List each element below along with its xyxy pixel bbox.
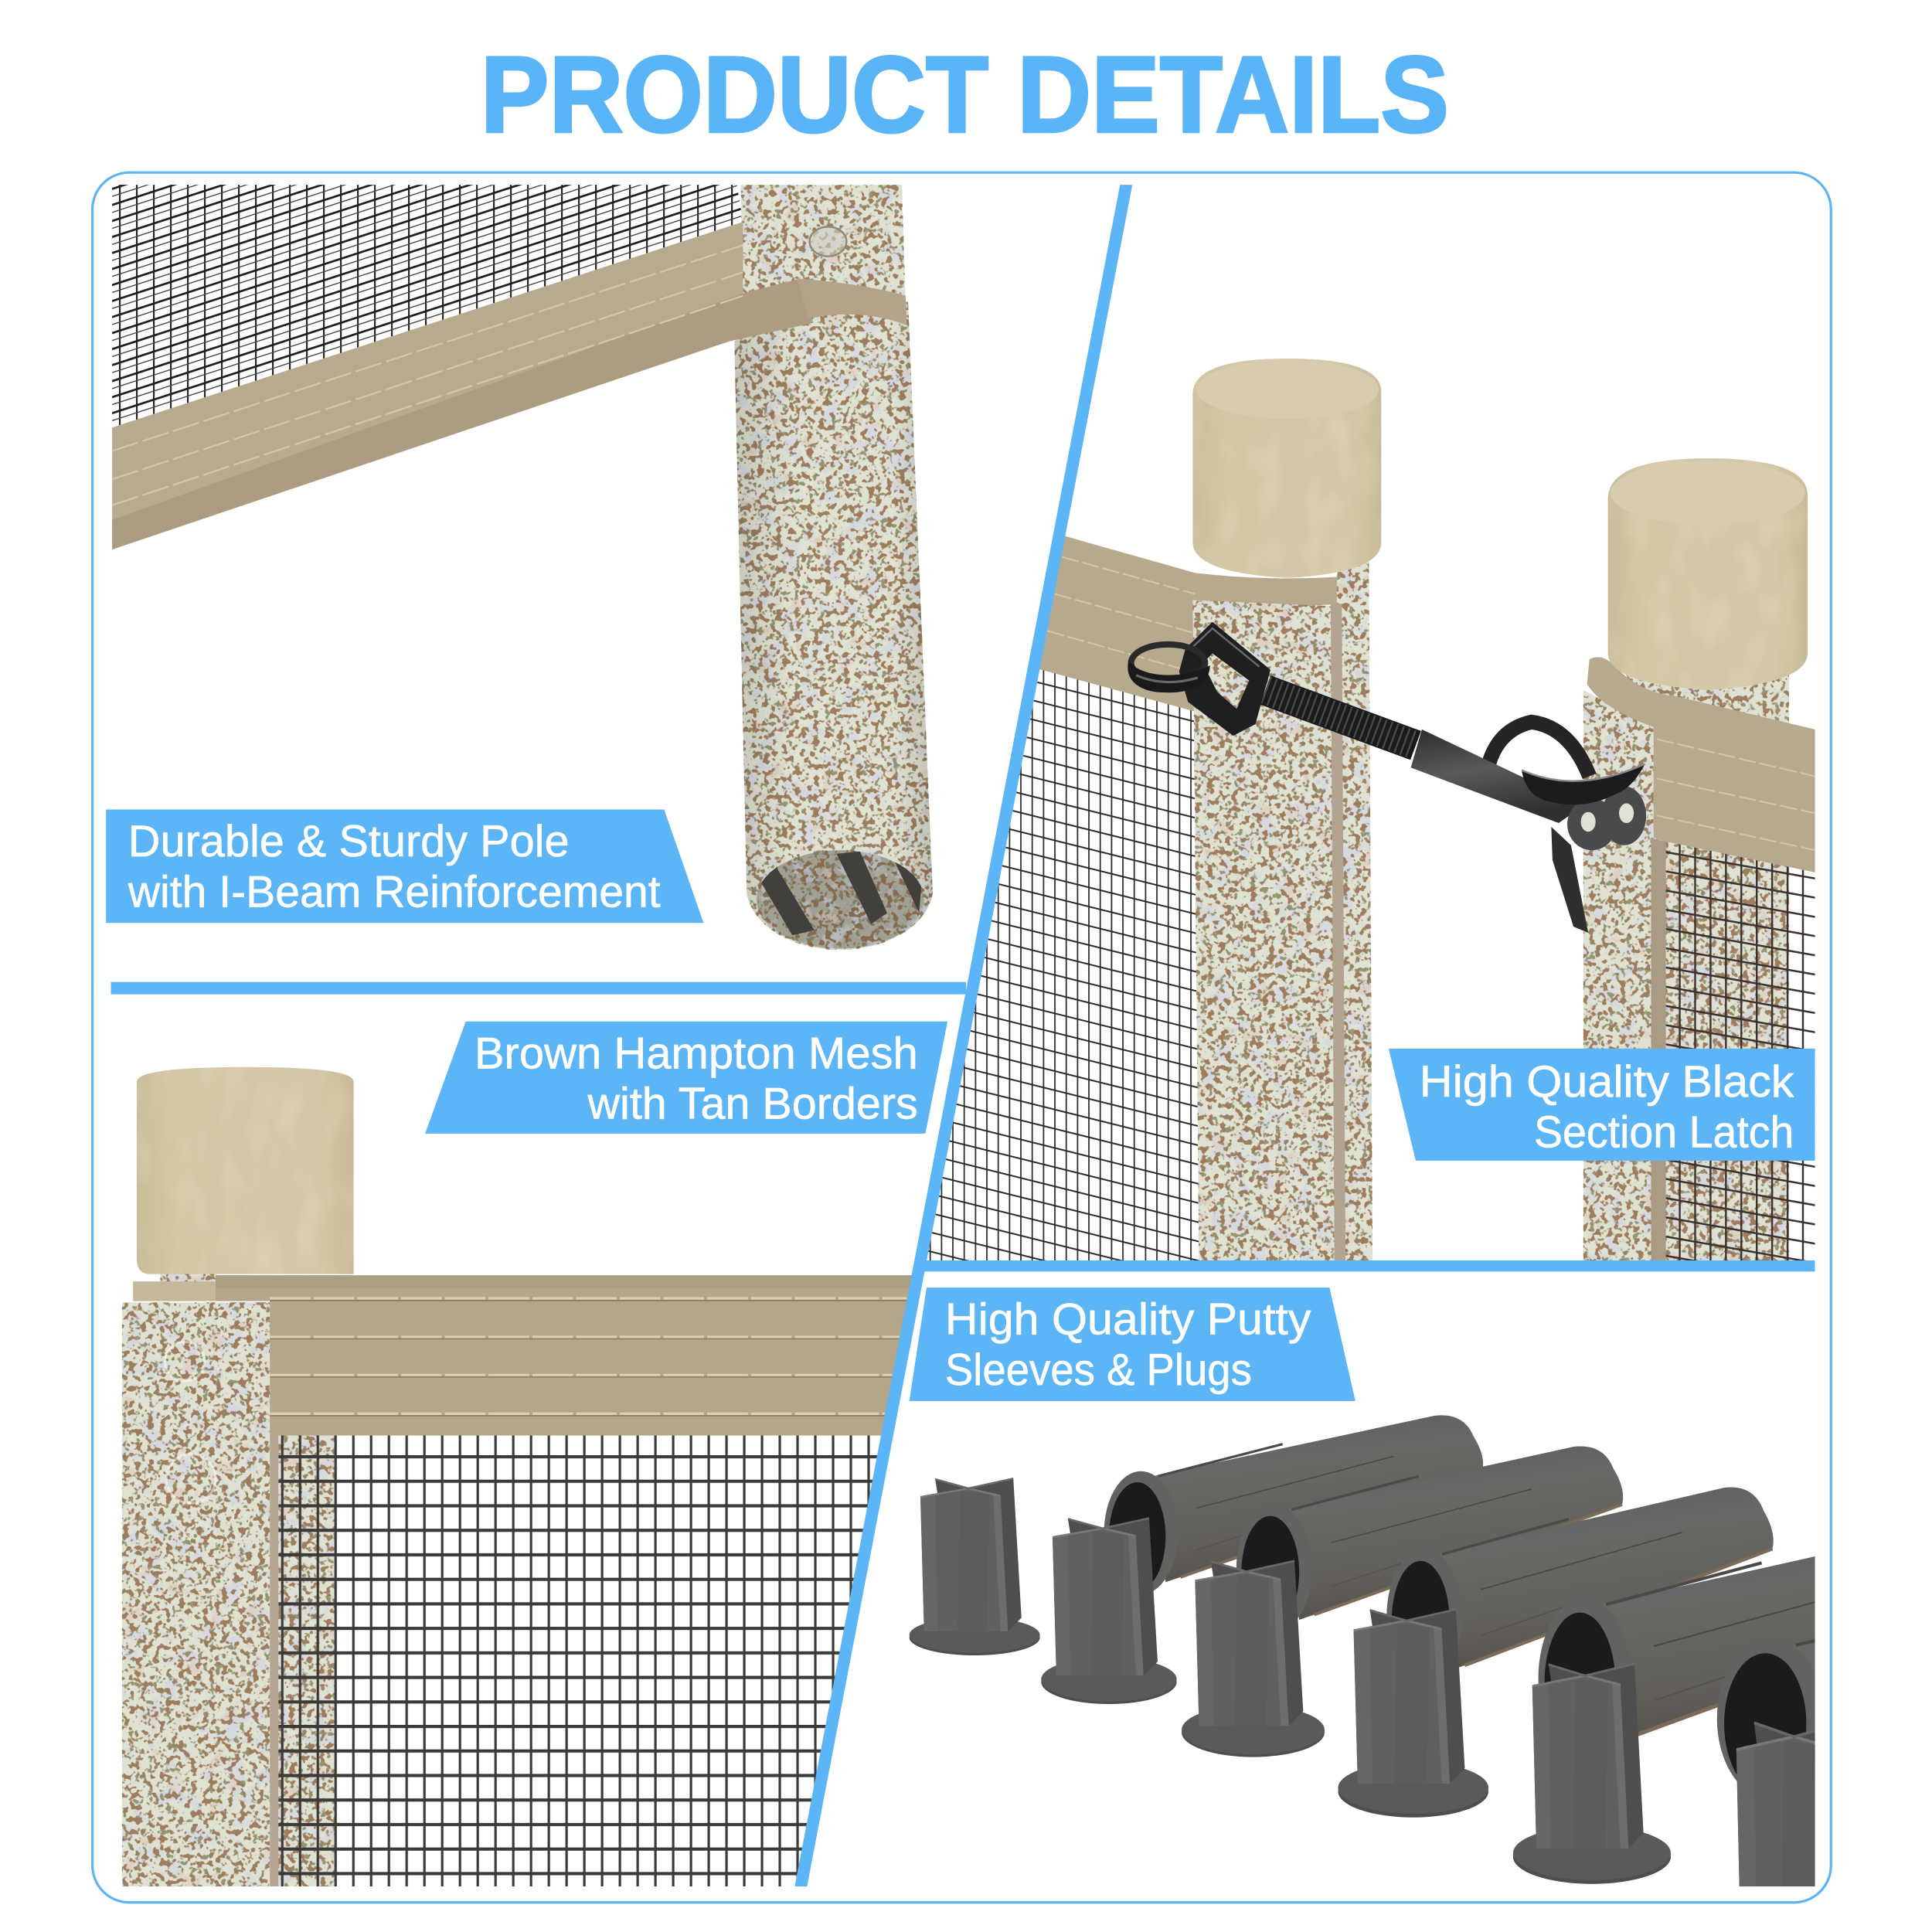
tan border right xyxy=(1587,657,1815,1260)
label: brown mesh xyxy=(425,1022,947,1134)
plug five xyxy=(1513,1664,1671,1884)
pole open end with I-beam xyxy=(752,850,930,949)
tan border strip xyxy=(112,222,813,549)
label: sleeves and plugs xyxy=(910,1287,1355,1401)
label: sleeves and plugs: High Quality Putty xyxy=(945,1295,1311,1345)
granite pole xyxy=(122,1302,270,1886)
pole collar xyxy=(798,278,906,325)
plug six xyxy=(1736,1722,1815,1886)
plug two xyxy=(1041,1519,1177,1704)
tan border xyxy=(133,1275,912,1435)
panel: section latch xyxy=(927,359,1815,1260)
cap two xyxy=(1608,458,1808,690)
label: brown mesh: Brown Hampton Mesh xyxy=(474,1029,918,1078)
tan border left xyxy=(1039,536,1341,713)
cap one xyxy=(1192,359,1381,578)
label: section latch: Section Latch xyxy=(1534,1107,1794,1157)
label: brown mesh: with Tan Borders xyxy=(587,1080,918,1129)
right mesh xyxy=(1666,842,1815,1260)
label: durable pole: Durable & Sturdy Pole xyxy=(128,817,570,866)
sleeve two xyxy=(1236,1446,1623,1633)
plug one xyxy=(910,1478,1040,1655)
granite behind mesh xyxy=(278,1435,335,1886)
panel: sleeves and plugs xyxy=(910,1415,1932,1932)
label: durable pole: with I-Beam Reinforcement xyxy=(128,867,661,917)
pole two xyxy=(1583,653,1789,1260)
mesh close-up xyxy=(112,185,743,427)
granite pole xyxy=(734,185,933,950)
vertical tan strip xyxy=(270,1435,278,1886)
divider bars xyxy=(111,185,1815,1886)
plug three xyxy=(1182,1561,1325,1757)
sleeve four xyxy=(1538,1556,1815,1736)
sleeve five xyxy=(1717,1639,1815,1781)
label: durable pole xyxy=(106,810,703,923)
title: PRODUCT DETAILS xyxy=(481,34,1449,155)
panel: durable pole xyxy=(106,185,933,950)
icon: black section latch xyxy=(1128,624,1646,933)
plug four xyxy=(1338,1610,1488,1818)
label: sleeves and plugs: Sleeves & Plugs xyxy=(945,1345,1252,1395)
left mesh xyxy=(927,669,1202,1260)
label: section latch xyxy=(1389,1049,1815,1161)
sleeve three xyxy=(1386,1488,1774,1685)
label: section latch: High Quality Black xyxy=(1420,1057,1794,1107)
pole one xyxy=(1192,560,1372,1260)
cap xyxy=(137,1067,354,1287)
sleeve one xyxy=(1104,1415,1483,1594)
brown mesh grid xyxy=(278,1435,883,1886)
panel: mesh and borders xyxy=(122,1022,947,1886)
